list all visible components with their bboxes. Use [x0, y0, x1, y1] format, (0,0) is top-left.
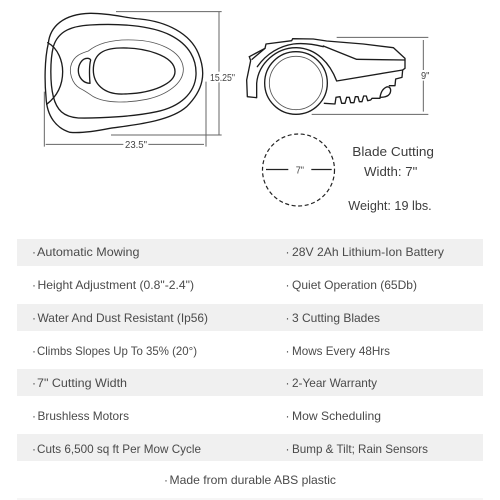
icon: dashed blade circle [262, 134, 334, 206]
row: motors and scheduling [32, 409, 381, 423]
row: material note: · [164, 473, 168, 487]
row: slopes and mowing frequency: · [32, 344, 36, 358]
row: motors and scheduling: · [32, 409, 36, 423]
dimension lines: top view [44, 12, 222, 147]
row: slopes and mowing frequency [32, 344, 390, 358]
text: weight: Weight: 19 lbs. [348, 198, 432, 213]
row: coverage and sensors: Bump & Tilt; Rain Sensors [292, 442, 428, 456]
row: cutting width and warranty: 7" Cutting Width [37, 376, 127, 390]
blade diameter label: 7" [296, 164, 304, 176]
dimension: height 9: 9" [421, 70, 430, 82]
row: height adjustment and quiet operation: Quiet Operation (65Db) [292, 278, 417, 292]
row: motors and scheduling: · [286, 409, 290, 423]
text: blade cutting width: Width: 7" [364, 164, 418, 179]
side view diagram [247, 37, 430, 114]
row: water resistance and cutting blades: · [286, 311, 290, 325]
row: material note: Made from durable ABS plastic [170, 473, 336, 487]
row: motors and scheduling: Brushless Motors [38, 409, 129, 423]
row: water resistance and cutting blades: Water And Dust Resistant (Ip56) [38, 311, 208, 325]
row: coverage and sensors: · [32, 442, 36, 456]
row: coverage and sensors: · [286, 442, 290, 456]
icon: mower side outline [247, 39, 405, 114]
row: water resistance and cutting blades [17, 304, 483, 331]
row: height adjustment and quiet operation: Height Adjustment (0.8"-2.4") [38, 278, 194, 292]
icon: mower top outline [45, 13, 203, 133]
row: height adjustment and quiet operation: · [32, 278, 36, 292]
bottom band [17, 498, 483, 500]
dimension: height 15.25: 15.25" [210, 72, 235, 84]
row: automatic mowing and battery: · [32, 245, 36, 259]
row: cutting width and warranty: · [286, 376, 290, 390]
row: coverage and sensors [17, 434, 483, 461]
row: motors and scheduling: Mow Scheduling [292, 409, 381, 423]
feature table [17, 239, 483, 500]
row: automatic mowing and battery: 28V 2Ah Lithium-Ion Battery [292, 245, 444, 259]
row: slopes and mowing frequency: · [286, 344, 290, 358]
row: automatic mowing and battery: · [286, 245, 290, 259]
row: cutting width and warranty: · [32, 376, 36, 390]
dimension lines: side view [312, 37, 428, 114]
row: coverage and sensors: Cuts 6,500 sq ft Per Mow Cycle [37, 442, 201, 456]
row: cutting width and warranty [17, 369, 483, 396]
row: automatic mowing and battery [17, 239, 483, 266]
row: cutting width and warranty: 2-Year Warranty [292, 376, 377, 390]
top view diagram [44, 12, 235, 151]
row: water resistance and cutting blades: · [32, 311, 36, 325]
row: height adjustment and quiet operation [32, 278, 417, 292]
text: blade cutting width [352, 144, 434, 179]
blade width lines [266, 168, 332, 170]
dimension: width 23.5: 23.5" [125, 139, 147, 151]
row: water resistance and cutting blades: 3 Cutting Blades [292, 311, 380, 325]
row: automatic mowing and battery: Automatic Mowing [37, 245, 140, 259]
row: slopes and mowing frequency: Mows Every 48Hrs [292, 344, 390, 358]
row: height adjustment and quiet operation: · [286, 278, 290, 292]
blade cutting diagram [262, 134, 334, 206]
text: blade cutting width: Blade Cutting [352, 144, 434, 159]
row: slopes and mowing frequency: Climbs Slopes Up To 35% (20°) [37, 344, 197, 358]
